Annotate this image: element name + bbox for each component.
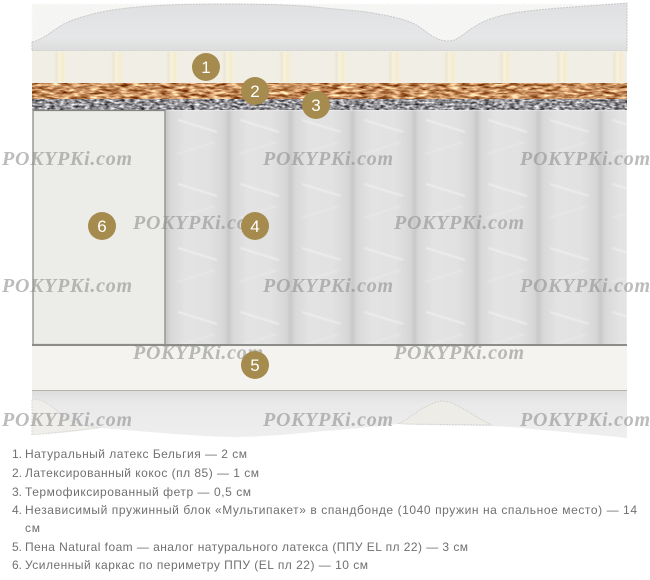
legend list: 1. (12, 447, 22, 461)
watermarks: POKYPKi.com (262, 148, 393, 170)
marker 6 (88, 212, 116, 240)
watermarks: POKYPKi.com (1, 409, 132, 431)
marker 6: 6 (97, 217, 107, 236)
legend list: 3. (12, 485, 22, 499)
legend list: Усиленный каркас по периметру ППУ (EL пл 22) — 10 см (25, 558, 368, 572)
watermarks: POKYPKi.com (519, 275, 650, 297)
watermarks: POKYPKi.com (132, 212, 263, 234)
top quilted cover (32, 3, 627, 51)
legend list: см (25, 521, 40, 535)
watermarks: POKYPKi.com (1, 148, 132, 170)
watermarks: POKYPKi.com (262, 409, 393, 431)
legend list: Латексированный кокос (пл 85) — 1 см (25, 466, 259, 480)
watermarks: POKYPKi.com (262, 275, 393, 297)
layer 4: spring block (165, 110, 627, 345)
marker 3 (302, 91, 330, 119)
watermarks: POKYPKi.com (1, 275, 132, 297)
legend list: 4. (12, 503, 22, 517)
layer 3: felt (32, 99, 627, 110)
marker 5 (241, 351, 269, 379)
legend list: Пена Natural foam — аналог натурального латекса (ППУ EL пл 22) — 3 см (25, 540, 468, 554)
marker 2 (241, 77, 269, 105)
marker 1: 1 (201, 58, 211, 77)
watermarks: POKYPKi.com (519, 148, 650, 170)
watermarks: POKYPKi.com (519, 409, 650, 431)
legend list: 2. (12, 466, 22, 480)
legend list: 5. (12, 540, 22, 554)
watermarks: POKYPKi.com (393, 342, 524, 364)
legend list: Независимый пружинный блок «Мультипакет» в спандбонде (1040 пружин на спальное место) — 14 (25, 503, 637, 517)
legend list: 6. (12, 558, 22, 572)
watermarks: POKYPKi.com (132, 342, 263, 364)
marker 4: 4 (250, 217, 260, 236)
layer 2: coconut (32, 83, 627, 99)
layer 1: latex (32, 51, 627, 83)
watermarks (1, 148, 650, 431)
marker 2: 2 (250, 82, 260, 101)
watermarks: POKYPKi.com (393, 212, 524, 234)
legend list (12, 447, 637, 572)
marker 1 (192, 53, 220, 81)
legend list: Термофиксированный фетр — 0,5 см (25, 485, 251, 499)
marker 5: 5 (250, 356, 260, 375)
marker 3: 3 (311, 96, 321, 115)
legend list: Натуральный латекс Бельгия — 2 см (25, 447, 247, 461)
layer 6: perimeter frame (33, 110, 165, 344)
mattress cross-section (32, 3, 627, 442)
bottom quilted cover (32, 391, 627, 442)
layer 5: foam (32, 344, 627, 392)
marker 4 (241, 212, 269, 240)
